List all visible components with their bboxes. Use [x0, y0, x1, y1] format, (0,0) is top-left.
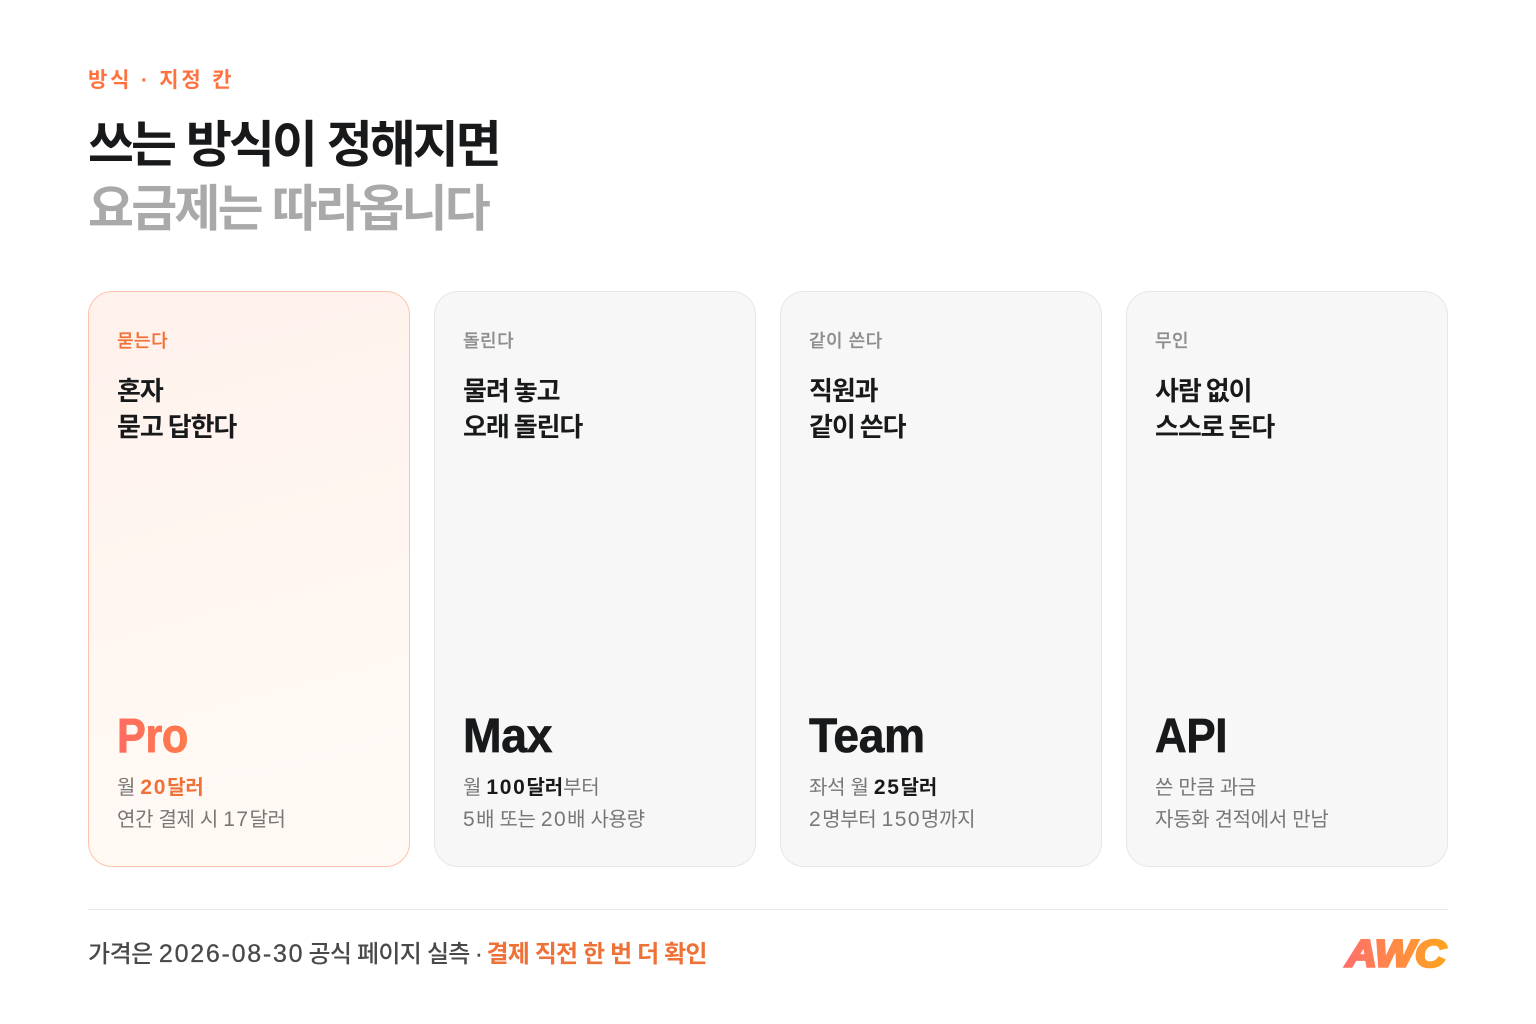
eyebrow: 방식 · 지정 칸	[88, 69, 234, 92]
heading: 물려 놓고 오래 돌린다: 오래 돌린다	[463, 412, 582, 442]
label: 같이 쓴다: 같이 쓴다	[809, 331, 883, 351]
plan name: Team: Team	[809, 710, 925, 763]
heading: 혼자 묻고 답한다	[117, 376, 237, 442]
plan name: Max: Max	[463, 710, 552, 763]
plan name: API: API	[1155, 710, 1227, 763]
price note: 연간 결제 시 17달러	[117, 808, 286, 831]
panel: Max	[434, 291, 756, 867]
heading: 직원과 같이 쓴다	[809, 376, 906, 442]
price note: 2명부터 150명까지	[809, 808, 975, 831]
heading: 물려 놓고 오래 돌린다	[463, 376, 583, 442]
title: 요금제는 따라옵니다	[88, 181, 488, 237]
price: 월 100달러부터	[463, 776, 599, 799]
label: 무인: 무인	[1155, 331, 1189, 351]
price: 쓴 만큼 과금	[1155, 777, 1256, 799]
heading: 혼자 묻고 답한다: 묻고 답한다	[117, 412, 236, 442]
price note: 5배 또는 20배 사용량	[463, 808, 645, 831]
label: 돌린다: 돌린다	[463, 331, 514, 351]
heading: 직원과 같이 쓴다: 직원과	[809, 376, 877, 406]
price: 월 20달러	[117, 776, 204, 799]
heading: 물려 놓고 오래 돌린다: 물려 놓고	[463, 376, 559, 406]
price: 좌석 월 25달러	[809, 776, 937, 799]
panel: Team	[780, 291, 1102, 867]
heading: 직원과 같이 쓴다: 같이 쓴다	[809, 412, 905, 442]
heading: 사람 없이 스스로 돈다: 사람 없이	[1155, 376, 1251, 406]
footer note: 가격은 2026-08-30 공식 페이지 실측 · 결제 직전 한 번 더 확인	[88, 940, 707, 968]
plan name: Pro: Pro	[117, 710, 188, 763]
title	[88, 117, 499, 237]
heading: 사람 없이 스스로 돈다: 스스로 돈다	[1155, 412, 1274, 442]
panel: API	[1126, 291, 1448, 867]
panel: Pro	[88, 291, 410, 867]
heading: 혼자 묻고 답한다: 혼자	[117, 376, 163, 406]
heading: 사람 없이 스스로 돈다	[1155, 376, 1275, 442]
label: 묻는다: 묻는다	[117, 331, 168, 351]
price note: 자동화 견적에서 만남	[1155, 809, 1328, 831]
title: 쓰는 방식이 정해지면	[88, 117, 499, 173]
